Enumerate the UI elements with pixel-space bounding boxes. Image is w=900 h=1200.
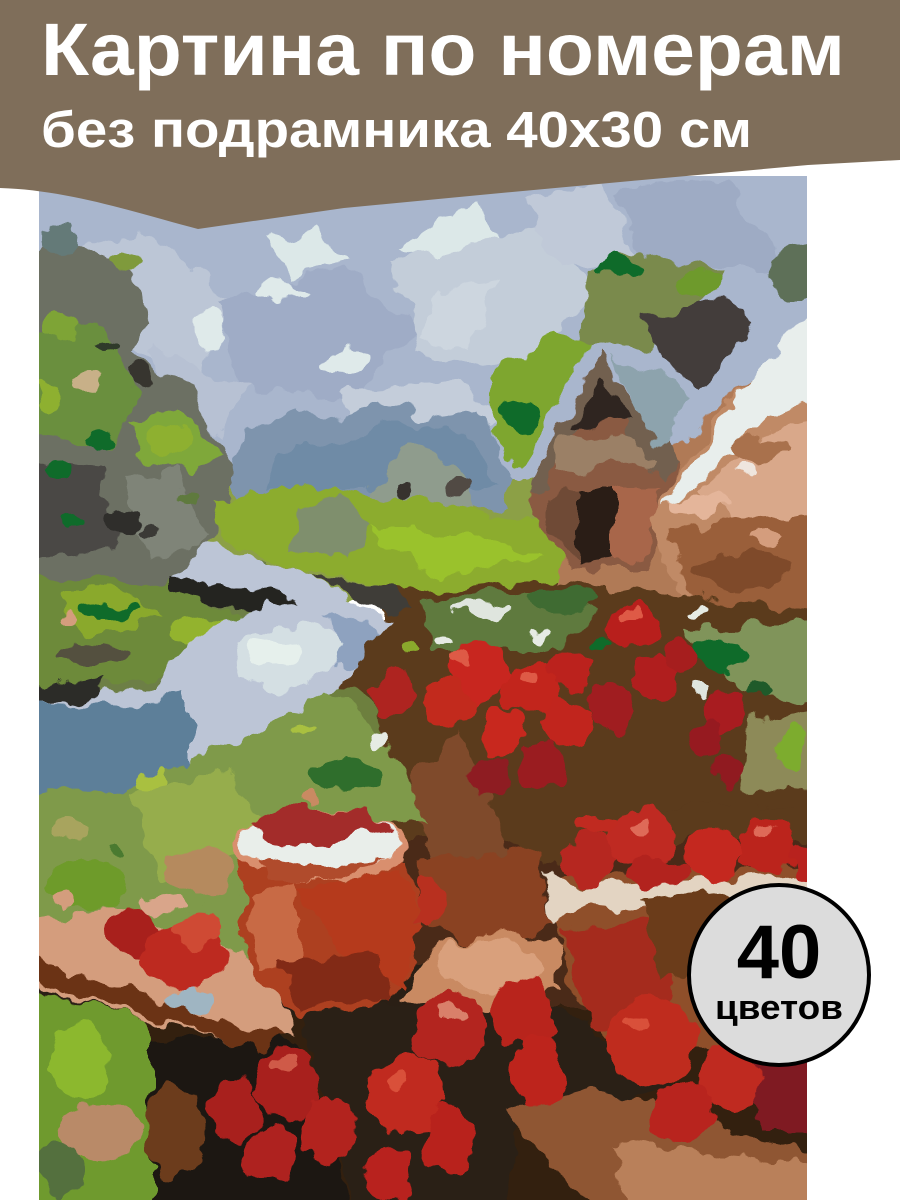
paint specks and highlights — [47, 344, 786, 1088]
subtitle: без подрамника 40х30 см — [41, 101, 752, 158]
river — [39, 541, 412, 795]
meadow — [39, 483, 566, 690]
title: Картина по номерам — [41, 8, 845, 91]
title banner — [0, 0, 900, 229]
foliage above house — [489, 244, 807, 469]
badge: 40 colors: цветов — [715, 989, 843, 1027]
bowl with tomatoes — [541, 804, 807, 1050]
foreground tomatoes — [210, 977, 870, 1200]
left trees — [39, 222, 234, 586]
wooden board left — [39, 906, 294, 1055]
clay pot — [235, 808, 420, 1015]
tomato bush — [328, 580, 807, 866]
lower dark table base — [39, 992, 807, 1200]
lower left grass — [39, 692, 428, 912]
badge: 40 colors — [689, 885, 869, 1065]
badge: 40 colors: 40 — [737, 910, 821, 995]
distant mountains — [230, 400, 510, 520]
tomatoes on board — [107, 897, 227, 992]
thatched roof — [650, 318, 807, 614]
painting: tomatoes and village landscape — [39, 176, 807, 1200]
sky with clouds — [39, 176, 807, 481]
base tones — [39, 381, 807, 1016]
jug behind pot — [400, 850, 560, 1015]
wooden house — [530, 355, 690, 570]
